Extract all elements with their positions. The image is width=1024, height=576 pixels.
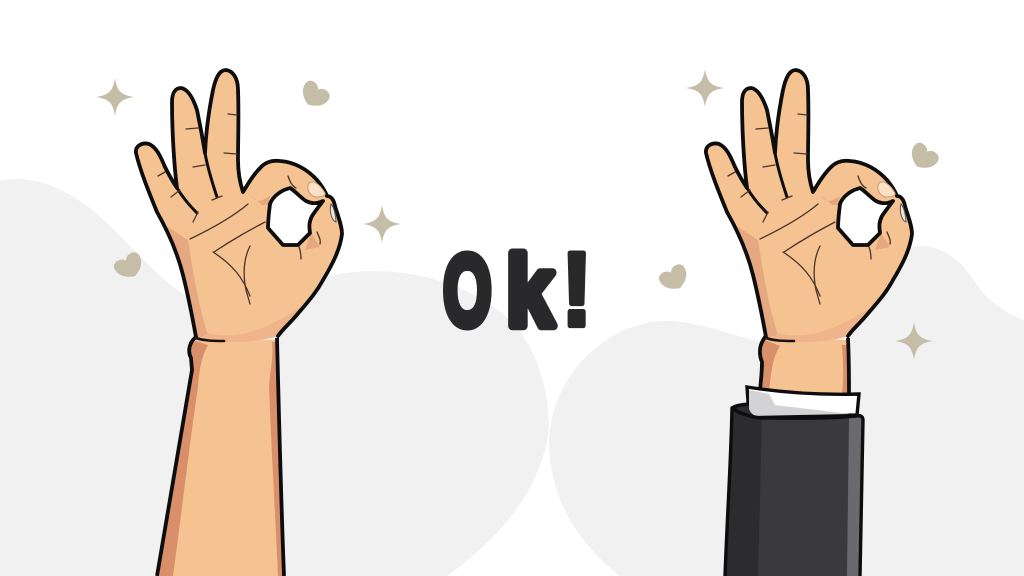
sparkle: left near hand	[363, 205, 401, 243]
jacket sleeve	[725, 404, 863, 576]
sparkle: top right	[686, 69, 724, 107]
sparkle: lower right	[895, 322, 933, 360]
wrist	[760, 337, 849, 394]
left hand	[136, 70, 342, 345]
heart: lower left	[112, 250, 147, 283]
title: Ok!	[443, 231, 593, 349]
heart: center right	[657, 262, 692, 295]
title: Ok!: k	[506, 235, 554, 347]
heart: top right	[905, 140, 941, 175]
shirt cuff	[747, 387, 859, 416]
right hand	[706, 70, 912, 345]
heart: top left	[296, 78, 332, 113]
background blob: left	[0, 179, 549, 576]
sparkle: top left	[96, 78, 134, 116]
left arm and hand	[136, 70, 342, 576]
background blob: right	[549, 246, 1024, 576]
bare forearm	[157, 338, 284, 576]
title: Ok!: !	[561, 231, 593, 349]
right arm and hand	[706, 70, 912, 576]
title: Ok!: O	[443, 235, 492, 347]
